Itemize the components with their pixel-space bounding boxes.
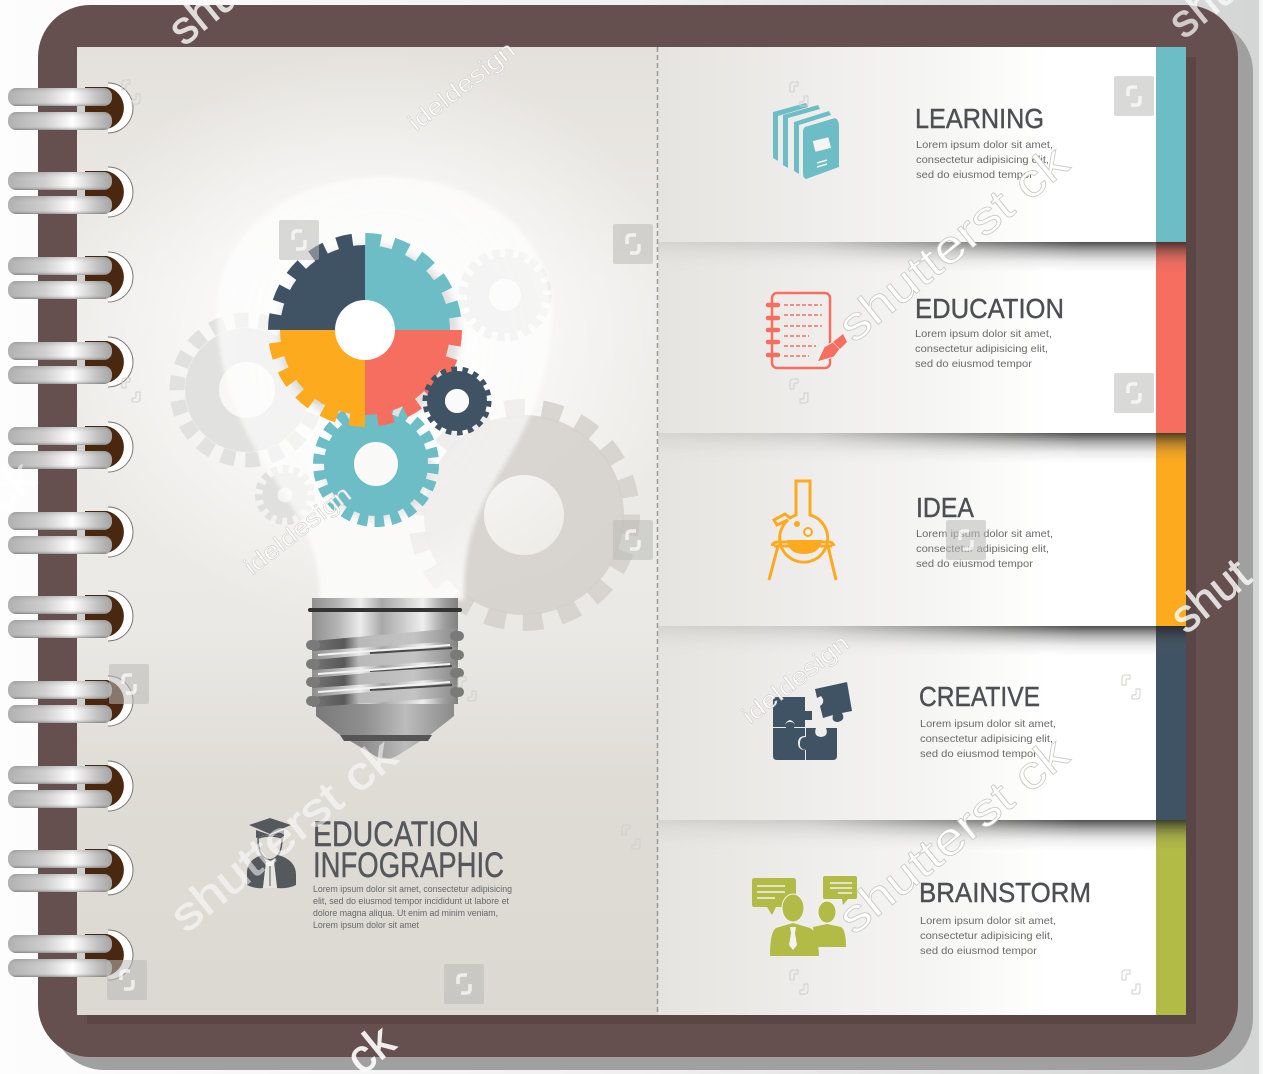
text block: creative: sed do eiusmod tempor xyxy=(920,748,1038,760)
heading: education: EDUCATION xyxy=(915,293,1064,324)
panel: creative xyxy=(658,626,1186,820)
icon: books xyxy=(773,103,839,179)
bulb metal base xyxy=(306,598,464,759)
text block: brainstorm xyxy=(920,915,1056,957)
icon: people with speech bubbles xyxy=(752,876,857,956)
text block: brainstorm: consectetur adipisicing elit, xyxy=(920,930,1053,942)
watermark overlay: shutterst ck xyxy=(828,726,1079,944)
text block: intro: Lorem ipsum dolor sit amet xyxy=(313,920,419,931)
gear shadows xyxy=(279,245,459,425)
text block: learning: sed do eiusmod tempor xyxy=(916,169,1034,181)
heading: idea: IDEA xyxy=(916,492,974,523)
text block: brainstorm: sed do eiusmod tempor xyxy=(920,945,1038,957)
text block: intro: Lorem ipsum dolor sit amet, consectetur adipisicing xyxy=(313,884,512,895)
heading: education infographic xyxy=(313,815,504,885)
dashed fold line xyxy=(656,47,658,1015)
panel: brainstorm xyxy=(658,820,1186,1015)
teal gear xyxy=(319,407,433,521)
text block: intro xyxy=(313,884,512,931)
inner page shadow xyxy=(87,57,1196,1024)
heading: brainstorm: BRAINSTORM xyxy=(919,877,1091,908)
text block: education xyxy=(915,328,1052,370)
watermark overlay: shutterst ck xyxy=(160,728,407,942)
text block: creative: consectetur adipisicing elit, xyxy=(920,733,1053,745)
heading: education infographic: EDUCATION xyxy=(313,815,479,854)
text block: intro: elit, sed do eiusmod tempor incididunt ut labore et xyxy=(313,896,509,907)
text block: creative: Lorem ipsum dolor sit amet, xyxy=(920,718,1056,730)
main four colour gear xyxy=(275,240,455,420)
text block: intro: dolore magna aliqua. Ut enim ad minim veniam, xyxy=(313,908,498,919)
colour tab xyxy=(1156,47,1186,242)
watermark overlay: shutterst ck xyxy=(828,134,1079,352)
text block: education: sed do eiusmod tempor xyxy=(915,358,1033,370)
text block: idea xyxy=(916,528,1053,570)
spiral binding rings xyxy=(8,83,133,980)
watermark overlay: ideldesign xyxy=(239,481,357,581)
text block: learning: Lorem ipsum dolor sit amet, xyxy=(916,139,1053,151)
light bulb glass xyxy=(217,177,552,600)
panel shadow xyxy=(658,626,1186,652)
background gears xyxy=(177,253,631,622)
text block: education: consectetur adipisicing elit, xyxy=(915,343,1048,355)
icon: flask xyxy=(769,481,836,580)
panel shadow xyxy=(658,433,1186,458)
watermark overlay: shut xyxy=(1160,548,1260,643)
panel: idea xyxy=(658,433,1186,626)
colour tab xyxy=(1156,433,1186,626)
colour tab xyxy=(1156,242,1186,433)
icon: graduate xyxy=(247,818,296,888)
text block: idea: sed do eiusmod tempor xyxy=(916,558,1034,570)
text block: idea: consectetur adipisicing elit, xyxy=(916,543,1049,555)
text block: creative xyxy=(920,718,1056,760)
heading: education infographic: INFOGRAPHIC xyxy=(313,846,504,885)
heading: creative: CREATIVE xyxy=(919,681,1040,712)
panel: left page xyxy=(50,47,690,1015)
text block: learning: consectetur adipisicing elit, xyxy=(916,154,1049,166)
colour tab xyxy=(1156,626,1186,820)
icon: puzzle xyxy=(773,682,852,760)
icon: notebook and pen xyxy=(768,293,847,368)
panel shadow xyxy=(658,242,1186,268)
small dark gear xyxy=(426,370,488,432)
heading: learning: LEARNING xyxy=(915,103,1044,134)
text block: brainstorm: Lorem ipsum dolor sit amet, xyxy=(920,915,1056,927)
watermark overlay: ideldesign xyxy=(737,630,855,730)
watermark overlay: ideldesign xyxy=(403,37,521,137)
panel: education xyxy=(658,242,1186,433)
text block: education: Lorem ipsum dolor sit amet, xyxy=(915,328,1052,340)
panel shadow xyxy=(658,820,1186,846)
panel: learning xyxy=(658,47,1186,242)
text block: learning xyxy=(916,139,1053,181)
colour tab xyxy=(1156,820,1186,1015)
text block: idea: Lorem ipsum dolor sit amet, xyxy=(916,528,1053,540)
